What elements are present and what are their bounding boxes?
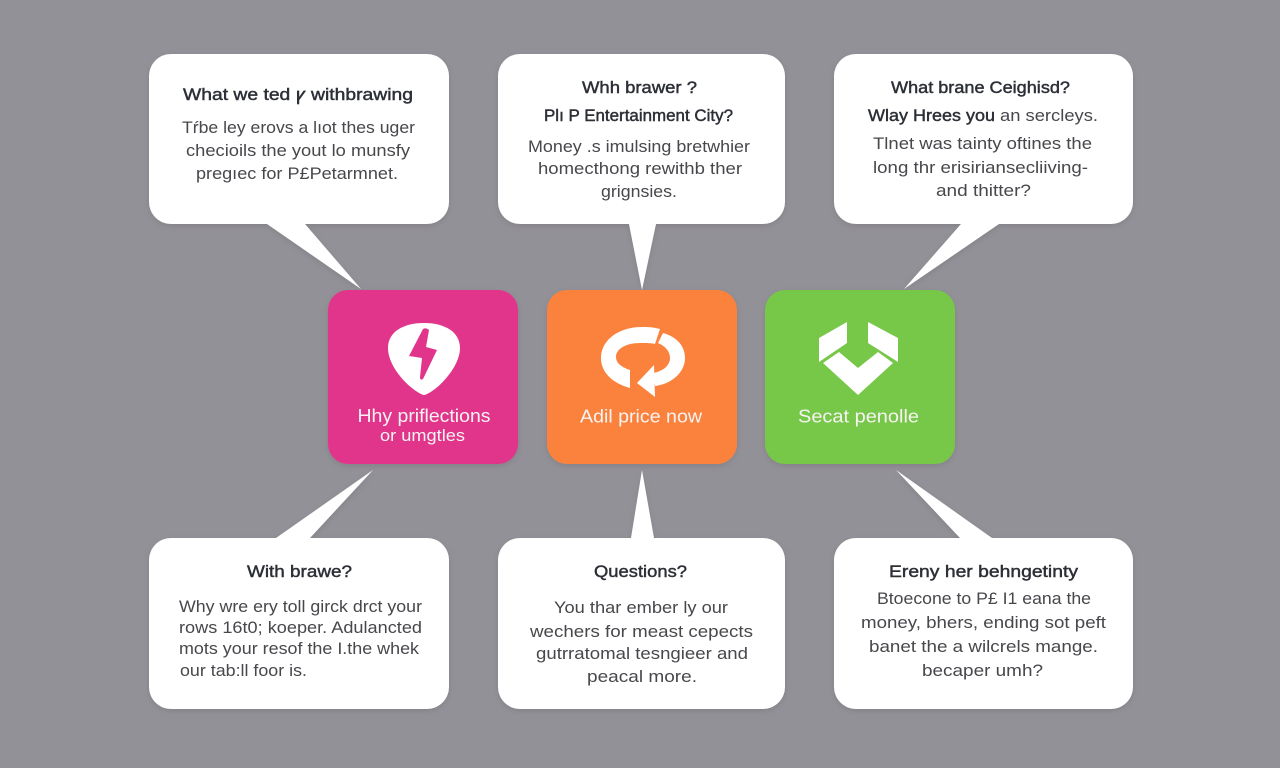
body text bbox=[529, 598, 753, 686]
label: or umgtles bbox=[380, 426, 465, 445]
body text bbox=[179, 597, 422, 680]
panel: pink tile bbox=[328, 290, 518, 464]
body text: money, bhers, ending sot peft bbox=[861, 613, 1106, 632]
panel: green tile bbox=[765, 290, 955, 464]
icon: folded chevron bbox=[819, 322, 898, 395]
body text: wechers for meast cepects bbox=[529, 622, 753, 641]
label: Secat penolle bbox=[798, 406, 919, 426]
body text: long thr erisiriansecliiving- bbox=[873, 158, 1088, 177]
heading: Ereny her behngetinty bbox=[889, 562, 1079, 581]
heading: Whh brawer ? bbox=[582, 78, 697, 97]
body text: peacal more. bbox=[587, 667, 697, 686]
body text: and thitter? bbox=[936, 181, 1031, 200]
panel: top middle callout bbox=[498, 54, 785, 290]
label bbox=[358, 406, 490, 445]
body text bbox=[861, 589, 1106, 680]
icon: circular arrow bbox=[601, 327, 685, 397]
body text: our tab:ll foor is. bbox=[180, 661, 307, 680]
panel: bottom right callout bbox=[834, 470, 1133, 709]
heading: What brane Ceighisd? bbox=[891, 79, 1070, 97]
heading: With brawe? bbox=[247, 562, 352, 581]
body text: rows 16t0; koeper. Adulancted bbox=[179, 618, 422, 637]
body text: Btoecone to P£ I1 eana the bbox=[877, 589, 1091, 608]
panel: bottom left callout bbox=[149, 470, 449, 709]
body text: checioils the yout lo munsfy bbox=[186, 141, 411, 160]
body text: Tŕbe ley erovs a lıot thes uger bbox=[182, 118, 415, 137]
label: Adil price now bbox=[580, 406, 703, 426]
body text: gutrratomal tesngieer and bbox=[536, 644, 748, 663]
heading bbox=[544, 78, 733, 125]
heading: Wlay Hrees you bbox=[868, 106, 995, 125]
body text bbox=[528, 137, 750, 201]
panel: top right callout bbox=[834, 54, 1133, 289]
body text: banet the a wilcrels mange. bbox=[869, 637, 1098, 656]
heading: What we ted ꝩ withbrawing bbox=[183, 85, 413, 105]
body text bbox=[182, 118, 415, 183]
body text: mots your resof the I.the whek bbox=[179, 639, 420, 658]
body text: Money .s imulsing bretwhier bbox=[528, 137, 750, 156]
label: Hhy priflections bbox=[358, 406, 490, 426]
panel: orange tile bbox=[547, 290, 737, 464]
panel: bottom middle callout bbox=[498, 470, 785, 709]
panel: top left callout bbox=[149, 54, 449, 289]
heading bbox=[868, 79, 1098, 125]
body text: homecthong rewithb ther bbox=[538, 159, 742, 178]
body text: You thar ember ly our bbox=[554, 598, 728, 617]
icon: pick with lightning bolt bbox=[388, 323, 460, 395]
heading: an sercleys. bbox=[1000, 106, 1098, 125]
heading: Questions? bbox=[594, 562, 687, 581]
body text: Why wre ery toll girck drct your bbox=[179, 597, 422, 616]
body text: pregıec for P£Petarmnet. bbox=[196, 164, 398, 183]
body text: Tlnet was tainty oftines the bbox=[873, 134, 1092, 153]
heading: Plı P Entertainment City? bbox=[544, 107, 733, 125]
body text: becaper umh? bbox=[922, 661, 1043, 680]
body text: grignsies. bbox=[601, 182, 677, 201]
body text bbox=[873, 134, 1092, 200]
